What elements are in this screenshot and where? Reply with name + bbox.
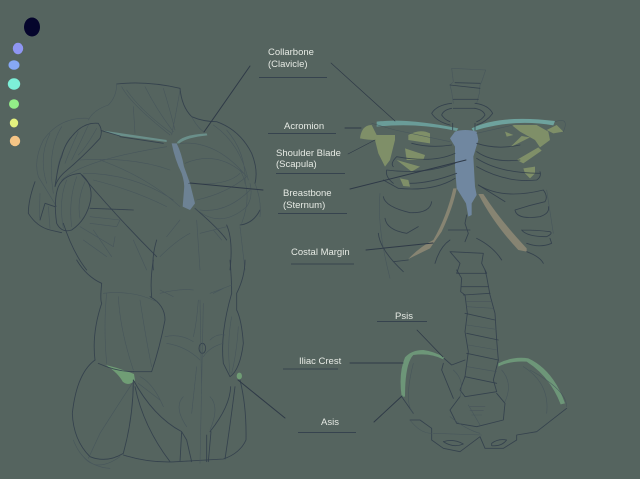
label: iliac crest: Iliac Crest: [299, 356, 342, 367]
lower torso: abdomen, hips, thighs: [72, 260, 246, 468]
label: costal margin: [291, 243, 433, 264]
label: shoulder blade: Shoulder Blade: [276, 148, 341, 159]
label: breastbone: [190, 160, 466, 214]
torso muscle drawing: [28, 83, 260, 468]
label: collarbone: [204, 47, 395, 132]
label: iliac crest: [283, 356, 403, 369]
label: shoulder blade: (Scapula): [276, 159, 317, 170]
rib cage and upper spine: [360, 68, 565, 278]
colour palette swatches: [8, 18, 40, 146]
label: collarbone: Collarbone: [268, 47, 314, 58]
label: psis: Psis: [395, 311, 413, 322]
label: asis: [238, 380, 402, 432]
label: acromion: [268, 121, 361, 134]
label: acromion: Acromion: [284, 121, 324, 132]
label: shoulder blade: [276, 140, 375, 174]
label: asis: Asis: [321, 417, 339, 428]
label: psis: [377, 311, 443, 357]
label: breastbone: (Sternum): [283, 200, 325, 211]
upper torso: chest, shoulders, neck: [28, 83, 260, 270]
label: breastbone: Breastbone: [283, 188, 332, 199]
lower spine and pelvis: [401, 270, 567, 452]
label: collarbone: (Clavicle): [268, 59, 308, 70]
label: costal margin: Costal Margin: [291, 247, 350, 258]
skeleton drawing: [360, 68, 567, 452]
